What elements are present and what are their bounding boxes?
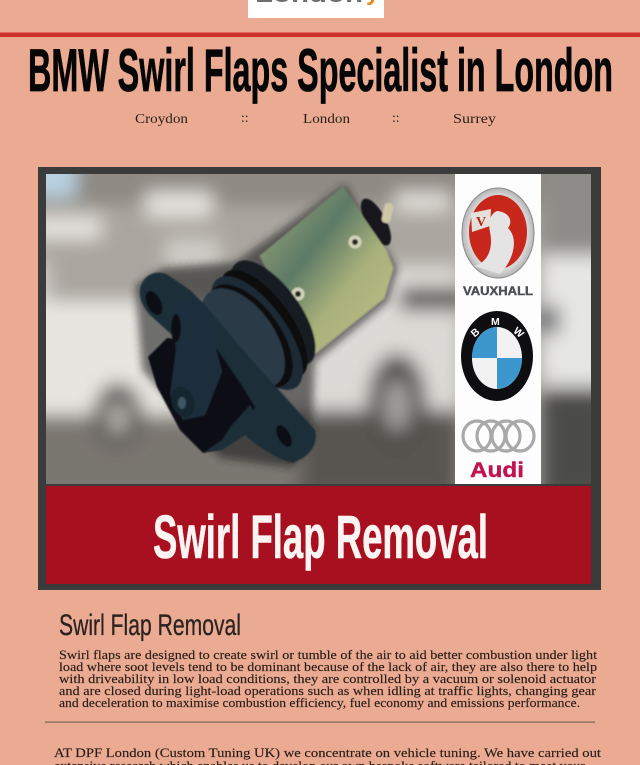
rubber seal rings	[215, 247, 331, 379]
red caption band	[46, 486, 591, 584]
location links	[135, 110, 496, 126]
white logo column	[455, 174, 541, 484]
location links: Croydon	[135, 111, 188, 126]
body paragraph: swirl flaps: load where soot levels tend to be dominant because of the lack of air, they are also there to help	[59, 660, 597, 674]
location links: Surrey	[453, 111, 496, 126]
hero image panel	[20, 150, 620, 590]
Vauxhall logo	[462, 188, 534, 298]
body paragraph: swirl flaps: Swirl flaps are designed to create swirl or tumble of the air to aid better combustion under light	[59, 648, 597, 662]
section heading: Swirl Flap Removal	[59, 609, 241, 642]
body paragraph: swirl flaps: and are closed during light-load operations such as when idling at traffic lights, changing gear	[59, 684, 597, 698]
location links: ::	[241, 110, 249, 125]
body paragraph: swirl flaps	[59, 648, 597, 710]
body paragraph: custom tuning	[54, 746, 601, 765]
Vauxhall logo: VAUXHALL	[463, 284, 533, 298]
swirl flap actuator part	[135, 184, 398, 468]
black lower body	[148, 338, 255, 453]
BMW logo: B	[469, 326, 483, 340]
body paragraph: swirl flaps: and deceleration to maximise combustion efficiency, fuel economy and emissions performance.	[59, 696, 580, 710]
Vauxhall logo: V	[476, 215, 486, 230]
location links: ::	[392, 110, 400, 125]
blurred garage photo	[46, 174, 591, 484]
connector pillar	[170, 297, 222, 420]
BMW logo	[461, 311, 533, 401]
location links: London	[303, 111, 350, 126]
BMW logo: W	[511, 325, 526, 341]
logo box	[248, 0, 384, 18]
actuator plunger and pin	[355, 194, 397, 250]
BMW logo: M	[491, 316, 500, 328]
Audi logo: Audi	[470, 459, 524, 482]
red header rule	[0, 32, 640, 37]
metal plate	[260, 187, 393, 356]
dark frame	[38, 167, 601, 590]
mounting flange	[140, 273, 316, 463]
seal disc	[184, 274, 302, 402]
Audi logo	[463, 421, 534, 482]
body paragraph: swirl flaps: with driveability in low load conditions, they are controlled by a vacuum or solenoid actuator	[59, 672, 597, 686]
body paragraph: custom tuning: AT DPF London (Custom Tuning UK) we concentrate on vehicle tuning. We have carried out	[54, 746, 601, 760]
